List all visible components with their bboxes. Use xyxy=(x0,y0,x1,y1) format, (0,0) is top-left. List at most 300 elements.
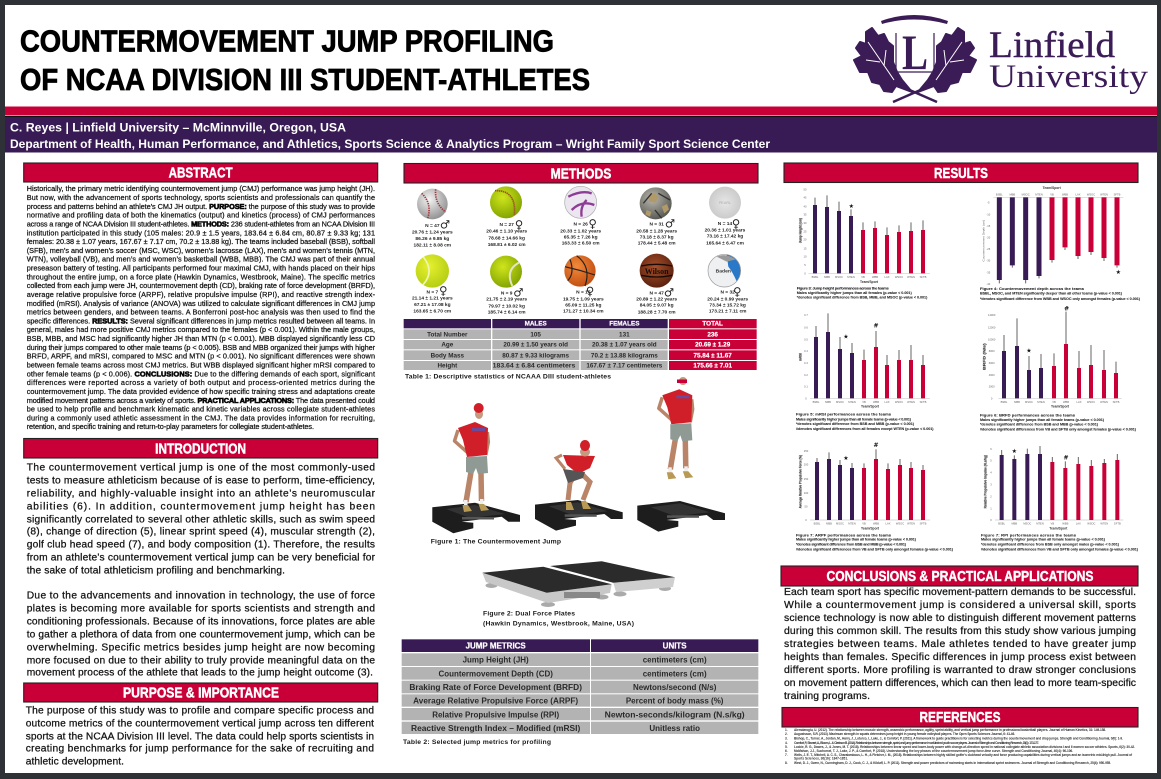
bar chart: figure 4 countermovement depth: WTEN xyxy=(1100,192,1108,196)
text block: abstract body: other female teams (p < 0.006). CONCLUSIONS: Due to the differing demands of each sport, significant xyxy=(27,369,375,378)
team stats: women's soccer: N = 26 xyxy=(573,221,588,227)
bar chart: figure 5 mRSI: # xyxy=(873,323,879,330)
bar chart: figure 4 countermovement depth: -10 xyxy=(986,212,991,216)
athlete in flight xyxy=(659,377,693,479)
bar chart: figure 7 ARPF: 200 xyxy=(804,463,809,467)
bar chart: figure 3 jump height: WTEN xyxy=(907,275,915,279)
bar chart: figure 3 jump height xyxy=(798,187,930,284)
bar chart: figure 5 mRSI xyxy=(798,313,930,409)
text block: introduction body: Due to the advancements and innovation in technology, the use of force xyxy=(27,591,375,602)
bar chart: figure 5 mRSI: mRSI xyxy=(798,353,802,361)
icon: volleyball: Baden xyxy=(716,269,731,275)
bar chart: figure 5 mRSI: 0 xyxy=(805,396,807,400)
table 1: descriptive statistics: 75.84 ± 11.67 xyxy=(694,352,732,359)
text block: abstract body: average relative propulsive force (ARPF), relative propulsive impulse (RPI), and reactive strength index- xyxy=(27,290,376,299)
caption: figure 6: #denotes significant differences from VB and SFTB only amongst females (p-value < 0.001) xyxy=(980,428,1137,432)
text block: abstract body: normative and profiling data of both the kinematics (output) and kinetics (process) of CMJ performances xyxy=(27,211,375,220)
team stats: men's basketball: ♂ xyxy=(664,285,674,299)
athlete in countermovement xyxy=(556,440,595,510)
bar chart: figure 6 BRFD: Team/Sport xyxy=(1051,405,1070,409)
text block: introduction body: conditioning professionals. Because of its innovations, force plates are able xyxy=(27,617,375,628)
bar chart: figure 3 jump height: 15 xyxy=(804,246,807,250)
bar chart: figure 6 BRFD: SFTB xyxy=(1113,400,1120,404)
team stats: lacrosse xyxy=(705,216,746,246)
bar chart: figure 7 ARPF: MSOC xyxy=(836,522,844,526)
panel: conclusions and practical applications xyxy=(781,566,1138,702)
team stats: women's soccer: ♀ xyxy=(589,216,597,230)
bar chart: figure 3 jump height: Jump Height (cm) xyxy=(798,218,802,243)
bar chart: figure 7 ARPF: 150 xyxy=(804,477,809,481)
text block: abstract body: Historically, the primary metric identifying countermovement jump (CMJ) performance was jump height (JH). xyxy=(27,184,375,193)
icon: lacrosse ball xyxy=(709,187,741,219)
icon: shield with letter L: L xyxy=(902,24,928,80)
table 1: descriptive statistics: 20.69 ± 1.29 xyxy=(695,342,731,349)
team stats: women's basketball: ♀ xyxy=(586,284,594,298)
icon: right oak leaf xyxy=(905,28,976,102)
bar chart: figure 8 RPI: 6 xyxy=(990,447,992,451)
bar chart: figure 3 jump height: 25 xyxy=(804,229,807,233)
bar chart: figure 8 RPI: SFTB xyxy=(1114,522,1121,526)
bar chart: figure 4 countermovement depth: WBB xyxy=(1062,192,1068,196)
bar chart: figure 4 countermovement depth: -35 xyxy=(986,270,991,274)
caption: figure 3: *denotes significant difference from BSB, MBB, and MSOC (p-value < 0.001) xyxy=(797,296,928,300)
table 1: descriptive statistics: Height xyxy=(437,363,458,370)
bar chart: figure 8 RPI: BSBL xyxy=(998,522,1006,526)
team stats: women's basketball: N = 15 xyxy=(576,289,591,295)
bar chart: figure 8 RPI: 3 xyxy=(990,483,992,487)
table 2: selected jump metrics: centimeters (cm) xyxy=(643,656,707,665)
team stats: volleyball: ♀ xyxy=(733,285,741,299)
team stats: men's soccer: 73.18 ± 8.37 kg xyxy=(640,234,674,240)
reference list: Bishop, C., Turner, A., Jordan, M., Harry, J., Loturco, I., Lake, J., & Comfort, P. (2021). A framework to guide practitioners for selecting metrics during the countermovement and drop jumps. Strength and Conditioning Journal, 0(0): 1-9. xyxy=(794,736,1123,740)
bar chart: figure 5 mRSI: MBB xyxy=(825,400,831,404)
reference list: Wells, J. E. T., Mitchell, A. C. S., Charalambous, L. H., & Fletcher, I. M., (2018). Relationships between highly skilled golfer’s clubhead velocity and force producing capabilities during vertical jumps and an isometric mid-thigh pull. Journal of xyxy=(794,753,1133,757)
bar chart: figure 3 jump height: ★ xyxy=(849,203,854,210)
caption: figure 8: #denotes significant differences from VB and SFTB only amongst females (p-value < 0.001) xyxy=(981,548,1139,552)
bar chart: figure 4 countermovement depth xyxy=(981,186,1123,286)
bar chart: figure 3 jump height: MTEN xyxy=(847,275,855,279)
team stats: men's tennis: 185.74 ± 6.14 cm xyxy=(488,310,526,316)
bar chart: figure 4 countermovement depth: -30 xyxy=(986,259,991,263)
text block: abstract body: modified movement patterns across a variety of sports. PRACTICAL APPLICATIONS: The data presented could xyxy=(27,396,375,405)
team balls and demographics xyxy=(412,186,748,316)
reference list: 1. xyxy=(785,728,788,732)
bar chart: figure 4 countermovement depth: -15 xyxy=(986,224,991,228)
team stats: men's basketball: N = 47 xyxy=(649,290,664,296)
team stats: women's soccer: 65.35 ± 7.26 kg xyxy=(564,234,598,240)
bar chart: figure 6 BRFD: LAX xyxy=(1076,400,1082,404)
bar chart: figure 4 countermovement depth: -25 xyxy=(986,247,991,251)
team stats: baseball: 86.26 ± 9.85 kg xyxy=(415,236,449,242)
text block: abstract body: countermovement jump. The data provided evidence of how specific training stress and adaptations create xyxy=(27,387,375,396)
reference list: Comfort, P., Stewart, A., Bloom, L. & Clarkson B. (2014). Relationships between strength, sprint, and jump performance in well-trained youth soccer players. Journal of Strength and Conditioning Research, 28(1): 173-177. xyxy=(794,741,1039,745)
bar chart: figure 4 countermovement depth: -5 xyxy=(987,201,990,205)
bar chart: figure 6 BRFD: 4000 xyxy=(989,373,995,377)
bar chart: figure 6 BRFD: WSOC xyxy=(1087,400,1095,404)
bar chart: figure 8 RPI: 4 xyxy=(990,471,992,475)
bar chart: figure 4 countermovement depth: -20 xyxy=(986,235,991,239)
bar chart: figure 7 ARPF: 50 xyxy=(805,505,808,509)
bar chart: figure 5 mRSI: 0.5 xyxy=(804,337,808,341)
text block: abstract body xyxy=(27,184,376,431)
panel: results xyxy=(784,163,1141,552)
table 2: selected jump metrics: UNITS xyxy=(663,642,687,651)
text block: abstract body: be used to help profile and benchmark kinematic and kinetic variables across collegiate student-athletes xyxy=(27,405,375,414)
text block: purpose body xyxy=(26,706,374,768)
heading: purpose and importance xyxy=(24,683,378,702)
table 1: descriptive statistics: 70.2 ± 13.88 kilograms xyxy=(591,352,658,359)
team stats: volleyball: 73.34 ± 15.72 kg xyxy=(709,303,746,309)
bar chart: figure 5 mRSI: ★ xyxy=(843,334,849,341)
table 1: descriptive statistics: 167.67 ± 7.17 centimeters xyxy=(586,363,663,370)
table 2: selected jump metrics xyxy=(402,639,758,734)
bar chart: figure 6 BRFD: MTEN xyxy=(1037,400,1045,404)
team stats: women's tennis: 163.65 ± 6.70 cm xyxy=(413,308,451,314)
wordmark: Linfield xyxy=(989,25,1116,66)
caption: figure 4: BSBL, MSOC, and MTEN significantly deeper than all other teams (p-value < 0.001) xyxy=(980,292,1123,296)
reference list: 3. xyxy=(785,736,788,740)
bar chart: figure 3 jump height: LAX xyxy=(884,275,890,279)
team stats: baseball: 20.76 ± 1.24 years xyxy=(412,229,453,235)
bar chart: figure 7 ARPF: 0 xyxy=(805,518,807,522)
team stats: softball: 20.46 ± 1.10 years xyxy=(486,229,527,235)
bar chart: figure 6 BRFD: 2000 xyxy=(989,385,995,389)
bar chart: figure 8 RPI: LAX xyxy=(1076,522,1081,526)
force plate 3 xyxy=(637,501,725,532)
heading: conclusions xyxy=(781,566,1138,586)
panel: methods xyxy=(402,164,758,746)
bar chart: figure 5 mRSI: SFTB xyxy=(920,400,927,404)
bar chart: figure 3 jump height: VB xyxy=(861,275,865,279)
text block: introduction body: abilities (6). In addition, countermovement jump height has been xyxy=(27,501,375,512)
bar chart: figure 3 jump height: SFTB xyxy=(920,275,927,279)
bar chart: figure 3 jump height: 5 xyxy=(804,263,806,267)
heading: references: REFERENCES xyxy=(920,710,1001,726)
caption: figure 7 xyxy=(796,532,954,552)
crimson band xyxy=(5,106,1157,116)
reference list: 5. xyxy=(785,745,788,749)
reference list: Sports Sciences, 36(16): 1847-1851. xyxy=(794,756,848,760)
title xyxy=(20,24,590,97)
bar chart: figure 6 BRFD: MBB xyxy=(1014,400,1020,404)
text block: conclusions body: Each team sport has specific movement-pattern demands to be successful. xyxy=(784,587,1136,598)
table 2: selected jump metrics: Percent of body mass (%) xyxy=(626,697,724,706)
reference list xyxy=(785,728,1135,765)
bar chart: figure 3 jump height: 50 xyxy=(804,187,807,191)
caption: figure 2 xyxy=(483,610,634,628)
team stats: softball: N = 27 xyxy=(499,222,514,228)
bar chart: figure 8 RPI: 1 xyxy=(990,506,992,510)
bar chart: figure 7 ARPF: 250 xyxy=(804,449,809,453)
icon: volleyball xyxy=(708,254,741,287)
caption: figure 5: #denotes significant differences from all females except WTEN (p-value < 0.001) xyxy=(796,427,934,431)
bar chart: figure 6 BRFD: 14000 xyxy=(988,313,996,317)
table 1: descriptive statistics: FEMALES xyxy=(609,321,639,328)
bar chart: figure 5 mRSI: 0.1 xyxy=(804,385,808,389)
table 1: descriptive statistics: 183.64 ± 6.84 centimeters xyxy=(493,363,576,370)
logo: Linfield University xyxy=(854,15,1149,102)
bar chart: figure 8 RPI: WSOC xyxy=(1087,522,1096,526)
caption: figure 4 xyxy=(980,286,1141,301)
text block: introduction body: overwhelming. Specific metrics besides jump height are now becoming xyxy=(27,643,375,654)
caption: figure 3: Figure 3: Jump height performances across the teams xyxy=(797,286,889,291)
caption: figure 6: Figure 6: BRFD performances across the teams xyxy=(980,412,1076,417)
bar chart: figure 4 countermovement depth: MBB xyxy=(1009,192,1015,196)
table 1: descriptive statistics: Age xyxy=(441,342,454,349)
text block: abstract body: during their jumps compared to other male teams (p < 0.005). BSB and MBB organized their jumps with higher xyxy=(27,343,376,352)
bar chart: figure 5 mRSI: 0.4 xyxy=(804,349,808,353)
team stats: baseball: ♂ xyxy=(440,217,450,231)
table 1: descriptive statistics: Body Mass xyxy=(431,352,465,359)
team stats: men's tennis: 21.75 ± 2.19 years xyxy=(486,297,527,303)
bar chart: figure 7 ARPF: # xyxy=(873,442,879,449)
bar chart: figure 8 RPI: MBB xyxy=(1011,522,1017,526)
team stats: volleyball xyxy=(707,285,748,315)
bar chart: figure 6 BRFD: ★ xyxy=(1026,348,1032,355)
text block: introduction body xyxy=(27,462,376,679)
bar chart: figure 8 RPI: Team/Sport xyxy=(1049,527,1068,531)
text block: purpose body: The purpose of this study was to profile and compare specific process and xyxy=(26,706,374,717)
bar chart: figure 8 RPI: ★ xyxy=(1012,448,1017,455)
table 2: selected jump metrics: centimeters (cm) xyxy=(643,669,707,678)
bar chart: figure 7 ARPF: SFTB xyxy=(920,522,927,526)
athlete standing xyxy=(454,403,489,512)
caption: figure 7: Figure 7: ARPF performances across the teams xyxy=(796,532,892,537)
bar chart: figure 5 mRSI: WBB xyxy=(873,400,879,404)
bar chart: figure 3 jump height: 30 xyxy=(804,221,807,225)
text block: introduction body: reliability, and highly-valuable insight into an athlete’s neuromuscular xyxy=(27,488,376,499)
text block: introduction body: The countermovement vertical jump is one of the most commonly-used xyxy=(27,462,375,473)
bar chart: figure 3 jump height: MSOC xyxy=(835,275,843,279)
text block: abstract body: institution participated in this study (105 males: 20.9 ± 1.5 years, 183.64 ± 6.84 cm, 80.87 ± 9.33 kg; 131 xyxy=(27,228,375,237)
text block: conclusions body: training programs. xyxy=(784,691,870,702)
bar chart: figure 7 ARPF: 100 xyxy=(804,491,809,495)
bar chart: figure 3 jump height: 40 xyxy=(804,204,807,208)
bar chart: figure 6 BRFD: 12000 xyxy=(988,325,996,329)
figure 1: the countermovement jump xyxy=(432,377,725,533)
caption: figure 4: *denotes significant difference from WBB and WSOC only amongst females (p-value < 0.001) xyxy=(980,297,1141,301)
caption: figure 6 xyxy=(980,412,1137,432)
text block: purpose body: athletic development. xyxy=(26,757,124,768)
table 2: selected jump metrics: Average Relative Propulsive Force (ARPF) xyxy=(413,697,579,706)
bar chart: figure 5 mRSI: MTEN xyxy=(848,400,856,404)
bar chart: figure 5 mRSI: MSOC xyxy=(836,400,844,404)
bar chart: figure 5 mRSI: Team/Sport xyxy=(861,405,880,409)
force plate 2 xyxy=(535,500,623,531)
team stats: baseball: 182.11 ± 8.08 cm xyxy=(414,242,451,248)
team stats: baseball xyxy=(412,217,453,248)
bar chart: figure 3 jump height: 45 xyxy=(804,196,807,200)
wordmark: University xyxy=(989,59,1149,95)
bar chart: figure 5 mRSI: 0.2 xyxy=(804,373,808,377)
bar chart: figure 7 ARPF: WBB xyxy=(873,522,879,526)
caption: figure 5: Figure 5: mRSI performances across the teams xyxy=(796,411,892,416)
team stats: softball xyxy=(486,217,527,248)
caption: figure 6: Males significantly higher jumps than all female teams (p-value < 0.001) xyxy=(980,418,1105,422)
reference list: West, D. J., Owen, N., Cunningham, D. J., Cook, C. J., & Kilduff, L. P. (2011). Strength and power predictors of swimming starts in international sprint swimmers. Journal of Strength and Conditioning Research, 25(4): 950-955. xyxy=(794,761,1111,765)
table 1: descriptive statistics: 105 xyxy=(530,331,541,338)
team stats: softball: 168.81 ± 6.02 cm xyxy=(488,242,526,248)
reference list: 6. xyxy=(785,749,788,753)
icon: lacrosse ball: PEARL xyxy=(719,201,731,205)
caption: figure 2: Figure 2: Dual Force Plates xyxy=(483,610,575,618)
bar chart: figure 8 RPI: MTEN xyxy=(1036,522,1044,526)
bar chart: figure 6 BRFD: WTEN xyxy=(1100,400,1108,404)
team stats: women's tennis: 21.14 ± 1.21 years xyxy=(412,296,453,302)
team stats: men's soccer: 178.44 ± 5.48 cm xyxy=(638,241,676,247)
text block: purpose body: sports at the NCAA Division III level. The data could help sports scientists in xyxy=(26,732,374,743)
bar chart: figure 7 ARPF: WSOC xyxy=(896,522,904,526)
bar chart: figure 8 RPI xyxy=(983,446,1123,531)
bar chart: figure 8 RPI: WTEN xyxy=(1100,522,1108,526)
table 2: selected jump metrics: Unitless ratio xyxy=(649,724,700,733)
reference list: 4. xyxy=(785,741,788,745)
bar chart: figure 5 mRSI: 0.3 xyxy=(804,361,808,365)
table 1: descriptive statistics: Total Number xyxy=(427,331,468,338)
text block: abstract body: modified (mRSI). Analysis of variance (ANOVA) was utilized to calculate significant differences in CMJ jump xyxy=(27,299,375,308)
bar chart: figure 7 ARPF: BSBL xyxy=(814,522,821,526)
text block: introduction body: movement process of the athlete that leads to the jump height outcome (3). xyxy=(27,668,373,679)
bar chart: figure 4 countermovement depth: WSOC xyxy=(1087,192,1095,196)
icon: basketball men xyxy=(640,254,674,288)
text block: abstract body: But now, with the advancement of sports technology, sports scientists and professionals can quantify the xyxy=(27,193,375,202)
text block: abstract body: females: 20.38 ± 1.07 years, 167.67 ± 7.17 cm, 70.2 ± 13.88 kg). The teams included baseball (BSB), softball xyxy=(27,237,375,246)
bar chart: figure 5 mRSI: BSBL xyxy=(813,400,820,404)
bar chart: figure 7 ARPF: Team/Sport xyxy=(861,527,880,531)
team stats: men's tennis: N = 9 xyxy=(501,290,513,296)
team stats: men's basketball: 20.89 ± 1.22 years xyxy=(636,296,677,302)
team stats: women's basketball: 171.27 ± 10.34 cm xyxy=(563,309,604,315)
bar chart: figure 6 BRFD: 8000 xyxy=(989,349,995,353)
bar chart: figure 3 jump height: WSOC xyxy=(895,275,903,279)
panel: abstract xyxy=(24,163,378,431)
caption: figure 7: Males significantly higher jumps than all female teams (p-value < 0.001) xyxy=(796,538,917,542)
team stats: lacrosse: 165.64 ± 6.47 cm xyxy=(706,240,744,246)
table 1: descriptive statistics: 20.38 ± 1.07 years old xyxy=(592,342,657,349)
bar chart: figure 4 countermovement depth: BSBL xyxy=(996,192,1003,196)
text block: introduction body: significantly correlated to several other athletic skills, such as swim speed xyxy=(27,514,375,525)
bar chart: figure 7 ARPF: Average Relative Propulsive Force (%) xyxy=(798,454,802,508)
text block: abstract body: across a range of NCAA Division III student-athletes. METHODS: 236 student-athletes from an NCAA Division III xyxy=(27,220,375,228)
table 1: descriptive statistics xyxy=(404,319,757,370)
bar chart: figure 8 RPI: VB xyxy=(1051,522,1054,526)
table 2: selected jump metrics: Jump Height (JH) xyxy=(463,656,529,665)
table 2: selected jump metrics: Newton-seconds/kilogram (N.s/kg) xyxy=(605,710,745,719)
bar chart: figure 7 ARPF: WTEN xyxy=(907,522,915,526)
team stats: men's basketball: 84.05 ± 9.07 kg xyxy=(640,303,674,309)
team stats: lacrosse: 73.16 ± 17.42 kg xyxy=(707,234,743,240)
team stats: women's basketball: 65.09 ± 11.25 kg xyxy=(565,303,601,309)
text block: conclusions body: strategies between teams. Male athletes tended to have greater jump xyxy=(784,639,1136,650)
icon: volleyball women xyxy=(565,186,597,218)
text block: purpose body: outcome metrics of the countermovement vertical jump across ten different xyxy=(26,719,374,730)
team stats: women's soccer: 20.33 ± 1.02 years xyxy=(560,229,601,235)
bar chart: figure 8 RPI: WBB xyxy=(1062,522,1069,526)
team stats: women's basketball: 19.75 ± 1.09 years xyxy=(563,296,604,302)
heading: abstract: ABSTRACT xyxy=(169,166,233,182)
text block: abstract body: throughout the entire jump, on a force plate (Hawkin Dynamics, Westbrook, Maine). The specific metrics xyxy=(27,272,375,281)
text block: abstract body: WTN), volleyball (VB), and men’s and women’s basketball (WBB, MBB). The CMJ was part of their annual xyxy=(27,255,375,264)
wordmark xyxy=(989,25,1149,95)
text block: introduction body: more focused on due to their ability to truly provide meaningful data on the xyxy=(27,656,375,667)
bar chart: figure 6 BRFD: VB xyxy=(1052,400,1056,404)
team stats: lacrosse: N = 14 xyxy=(718,221,732,227)
bar chart: figure 8 RPI: 5 xyxy=(990,459,992,463)
reference list: Augustsson, S.R. (2013). Maximum strength in squats determines jump height in young female volleyball players. The Open Sports Sciences Journal, 6: 41-46. xyxy=(794,732,1015,736)
bar chart: figure 4 countermovement depth: SFTB xyxy=(1114,192,1121,196)
text block: abstract body: between female teams across most CMJ metrics. But WBB displayed significant higher mRSI compared to xyxy=(27,360,375,370)
team stats: men's soccer: 20.58 ± 1.28 years xyxy=(636,229,677,235)
heading: methods xyxy=(404,164,758,183)
table 2: selected jump metrics: Braking Rate of Force Development (BRFD) xyxy=(409,683,582,692)
reference list: 8. xyxy=(785,761,788,765)
heading: methods: METHODS xyxy=(551,166,612,182)
bar chart: figure 3 jump height: BSBL xyxy=(812,275,819,279)
caption: figure 7: *denotes significant difference from BSB and MBB (p-value < 0.001) xyxy=(796,543,907,547)
bar chart: figure 6 BRFD: 10000 xyxy=(988,337,996,341)
table 1: descriptive statistics: TOTAL xyxy=(702,321,723,328)
caption: figure 3 xyxy=(797,286,928,300)
text block: introduction body: tests to measure athleticism because of is ease to perform, time-efficiency, xyxy=(27,475,375,486)
bar chart: figure 7 ARPF: ★ xyxy=(843,455,849,462)
team stats: baseball: N = 47 xyxy=(425,223,440,229)
bar chart: figure 4 countermovement depth: LAX xyxy=(1075,192,1081,196)
text block: abstract body: general, males had more positive CMJ metrics compared to the females (p < 0.001). Within the male groups, xyxy=(27,325,375,334)
bar chart: figure 7 ARPF xyxy=(798,442,930,531)
text block: abstract body: BRFD, ARPF, and mRSI, compared to MSC and MTN (p < 0.001). No significant differences were shown xyxy=(27,352,375,361)
bar chart: figure 3 jump height: 0 xyxy=(804,271,806,275)
caption: figure 5: Males significantly higher jumps than all female teams (p-value < 0.001) xyxy=(796,417,912,421)
text block: conclusions body: heights than females. Specific differences in jump process exist between xyxy=(784,652,1136,663)
bar chart: figure 4 countermovement depth: -40 xyxy=(986,282,991,286)
reference list: Lockie, R. G., Dawes, J., & Jones, M. T. (2018). Relationships between linear speed and lower-body power with change-of-direction speed in national collegiate athletic association divisions I and II women soccer athletes. Sports, 6(2): 30-42. xyxy=(794,745,1135,749)
caption: figure 6: *denotes significant difference from BSB and MBB (p-value < 0.001) xyxy=(980,423,1099,427)
team stats: men's tennis: 79.97 ± 10.02 kg xyxy=(488,303,525,309)
text block: abstract body: differences were reported across a variety of both output and process-oriented metrics during the xyxy=(27,378,375,387)
bar chart: figure 4 countermovement depth: VB xyxy=(1050,192,1054,196)
bar chart: figure 8 RPI: Relative Propulsive Impulse (N.s/kg) xyxy=(983,454,987,508)
icon: arc above shield xyxy=(881,15,948,24)
reference list: Alemdaroglu, U. (2012). The relationship between muscle strength, anaerobic performance, agility, sprint ability, and vertical jump performance in professional basketball players. Journal of Human Kinetics, 31: 149-158. xyxy=(794,728,1106,732)
team stats: women's soccer: 163.33 ± 6.50 cm xyxy=(562,241,600,247)
bar chart: figure 5 mRSI: LAX xyxy=(884,400,890,404)
caption: figure 1: Figure 1: The Countermovement Jump xyxy=(431,538,561,545)
reference list: 7. xyxy=(785,753,788,757)
table 1: descriptive statistics: 175.66 ± 7.01 xyxy=(693,363,732,370)
icon: soccer ball xyxy=(640,187,672,219)
heading: introduction: INTRODUCTION xyxy=(155,442,246,458)
bar chart: figure 8 RPI: 2 xyxy=(990,495,992,499)
text block: abstract body: collected from each jump were JH, countermovement depth (CD), braking rate of force development (BRFD), xyxy=(27,281,375,290)
team stats: lacrosse: ♀ xyxy=(732,216,740,230)
table 2: selected jump metrics: JUMP METRICS xyxy=(466,642,526,651)
table 2: selected jump metrics: Relative Propulsive Impulse (RPI) xyxy=(432,710,559,719)
heading: purpose and importance: PURPOSE & IMPORTANCE xyxy=(123,686,279,702)
bar chart: figure 3 jump height: 10 xyxy=(804,255,807,259)
team stats: men's tennis: ♂ xyxy=(513,285,523,299)
heading: conclusions: CONCLUSIONS & PRACTICAL APPLICATIONS xyxy=(826,569,1094,585)
text block: introduction body: to gather a plethora of data from one countermovement jump, which can be xyxy=(27,630,375,641)
caption: figure 8 xyxy=(981,532,1139,552)
text block: abstract body: retention, and specific training and return-to-play parameters for collegiate student-athletes. xyxy=(27,422,314,431)
bar chart: figure 5 mRSI: WSOC xyxy=(895,400,903,404)
caption: figure 4: Figure 4: Countermovement depth across the teams xyxy=(980,286,1085,291)
bar chart: figure 6 BRFD: MSOC xyxy=(1025,400,1033,404)
caption: table 1: Table 1: Descriptive statistics of NCAAA DIII student-athletes xyxy=(405,374,611,380)
text block: conclusions body xyxy=(784,587,1136,702)
bar chart: figure 7 ARPF: MTEN xyxy=(848,522,856,526)
heading: references xyxy=(782,708,1138,727)
